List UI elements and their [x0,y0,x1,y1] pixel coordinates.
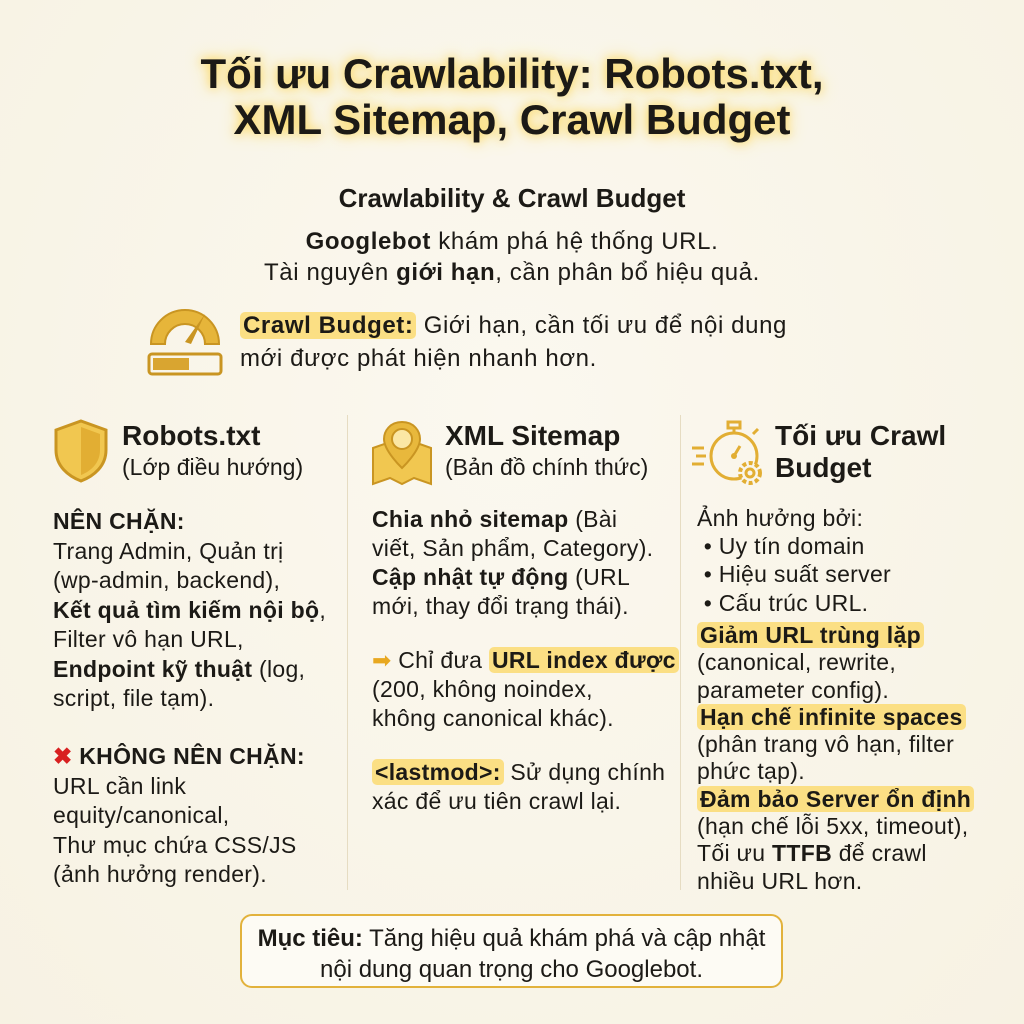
text: chia nhỏ: mới, thay đổi trạng thái). [372,593,629,619]
text: ảnh hưởng bởi [697,505,891,616]
text: giảm url trùng lặp: Đảm bảo Server ổn định [700,786,971,812]
text: chia nhỏ [372,506,653,619]
text: chia nhỏ: viết, Sản phẩm, Category). [372,535,653,561]
panel: robots.txt: (Lớp điều hướng) [122,454,303,480]
panel: crawl budget [692,420,974,894]
text: url index: ➡ Chỉ đưa URL index được [372,647,676,673]
panel: xml sitemap [372,420,679,814]
text: url index [372,647,679,731]
title: XML Sitemap, Crawl Budget [234,96,790,143]
text: giảm url trùng lặp: (hạn chế lỗi 5xx, timeout), [697,813,968,839]
text: giảm url trùng lặp: phức tạp). [697,758,805,784]
text: không nên chặn: equity/canonical, [53,802,229,828]
text: giảm url trùng lặp [697,622,974,894]
text: url index: (200, không noindex, [372,676,593,702]
text: lastmod [372,759,665,814]
text: giảm url trùng lặp: parameter config). [697,677,889,703]
text: nên chặn: Filter vô hạn URL, [53,626,244,652]
text: giảm url trùng lặp: (phân trang vô hạn, filter [697,731,954,757]
subtitle: Crawlability & Crawl Budget [339,183,685,213]
text: không nên chặn: Thư mục chứa CSS/JS [53,832,297,858]
text: nên chặn: Endpoint kỹ thuật (log, [53,656,305,682]
text: giảm url trùng lặp: Giảm URL trùng lặp [700,622,921,648]
text: nên chặn: Kết quả tìm kiếm nội bộ, [53,596,326,622]
icon: shield [54,419,108,483]
icon: map [372,421,432,486]
text: nên chặn: script, file tạm). [53,685,214,711]
intro text [264,228,760,286]
callout: mục tiêu: Mục tiêu: Tăng hiệu quả khám phá và cập nhật [258,925,765,952]
text: ảnh hưởng bởi: • Hiệu suất server [704,561,891,587]
text: ảnh hưởng bởi: • Cấu trúc URL. [704,590,868,616]
text: nên chặn: (wp-admin, backend), [53,567,280,593]
heading: Tối ưu Crawl [775,420,946,451]
text: không nên chặn: ✖ KHÔNG NÊN CHẶN: [53,743,305,769]
title [194,47,830,152]
callout: crawl budget: Crawl Budget: Giới hạn, cần tối ưu để nội dung [243,312,787,339]
text: url index: không canonical khác). [372,705,614,731]
icon: stopwatch [692,420,762,485]
icon: gauge [148,309,222,376]
text: ảnh hưởng bởi: • Uy tín domain [704,533,865,559]
callout: mục tiêu: nội dung quan trọng cho Googlebot. [320,956,703,983]
intro text: Googlebot khám phá hệ thống URL. [306,228,718,255]
heading: XML Sitemap [445,420,620,451]
panel: robots.txt [53,419,326,887]
text: giảm url trùng lặp: Tối ưu TTFB để crawl [697,840,927,866]
text: giảm url trùng lặp: Hạn chế infinite spaces [700,704,963,730]
callout: mục tiêu [240,914,783,988]
text: lastmod: xác để ưu tiên crawl lại. [372,788,621,814]
text: nên chặn: NÊN CHẶN: [53,508,185,534]
intro text: Tài nguyên giới hạn, cần phân bổ hiệu quả. [264,259,760,286]
title: Tối ưu Crawlability: Robots.txt, [200,50,824,97]
text: giảm url trùng lặp: nhiều URL hơn. [697,868,862,894]
text: không nên chặn: (ảnh hưởng render). [53,861,267,887]
panel: xml sitemap: (Bản đồ chính thức) [445,454,648,480]
text: ảnh hưởng bởi: Ảnh hưởng bởi: [697,505,863,531]
text: chia nhỏ: Cập nhật tự động (URL [372,564,630,590]
text: không nên chặn [53,743,305,887]
heading: Robots.txt [122,420,260,451]
callout: crawl budget: mới được phát hiện nhanh hơn. [240,345,597,372]
heading: Budget [775,452,871,483]
callout: crawl budget [240,312,787,372]
text: lastmod: <lastmod>: Sử dụng chính [375,759,665,785]
text: nên chặn: Trang Admin, Quản trị [53,538,283,564]
text: không nên chặn: URL cần link [53,772,186,798]
text: nên chặn [53,508,326,711]
text: giảm url trùng lặp: (canonical, rewrite, [697,649,896,675]
heading [775,420,946,483]
text: chia nhỏ: Chia nhỏ sitemap (Bài [372,506,617,532]
